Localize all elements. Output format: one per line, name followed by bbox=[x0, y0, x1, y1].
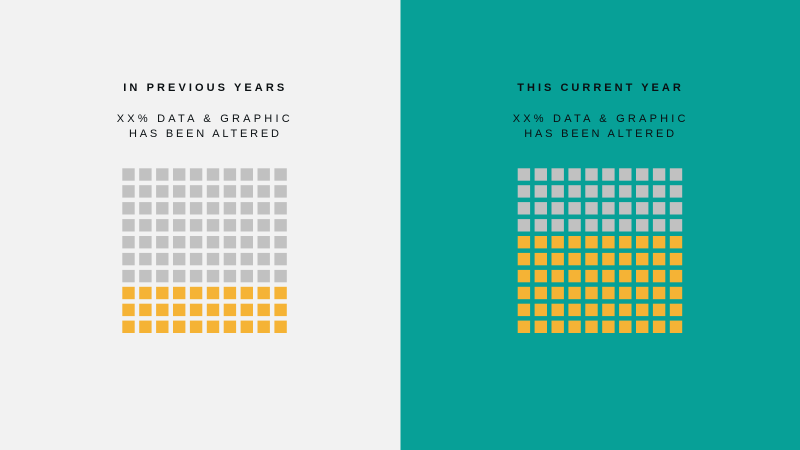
waffle rows: yellow, altered share bbox=[518, 236, 682, 333]
text block: current year description: HAS BEEN ALTERED bbox=[524, 128, 674, 140]
panel: this current year bbox=[400, 0, 800, 450]
waffle chart: previous years bbox=[122, 168, 287, 333]
heading: this current year: THIS CURRENT YEAR bbox=[517, 82, 681, 94]
text block: previous years description: HAS BEEN ALTERED bbox=[129, 128, 279, 140]
text block: current year description bbox=[513, 113, 686, 140]
text block: previous years description bbox=[117, 113, 290, 140]
waffle rows: grey, unaffected share bbox=[122, 168, 287, 282]
panel: in previous years bbox=[0, 0, 400, 450]
waffle chart: current year bbox=[518, 168, 682, 333]
heading: in previous years: IN PREVIOUS YEARS bbox=[123, 82, 284, 94]
panel background: teal bbox=[400, 0, 800, 450]
waffle rows: grey, unaffected share bbox=[518, 168, 682, 232]
text block: previous years description: XX% DATA & GRAPHIC bbox=[117, 113, 290, 125]
waffle rows: yellow, altered share bbox=[122, 287, 287, 333]
panel background: light grey bbox=[0, 0, 400, 450]
text block: current year description: XX% DATA & GRAPHIC bbox=[513, 113, 686, 125]
